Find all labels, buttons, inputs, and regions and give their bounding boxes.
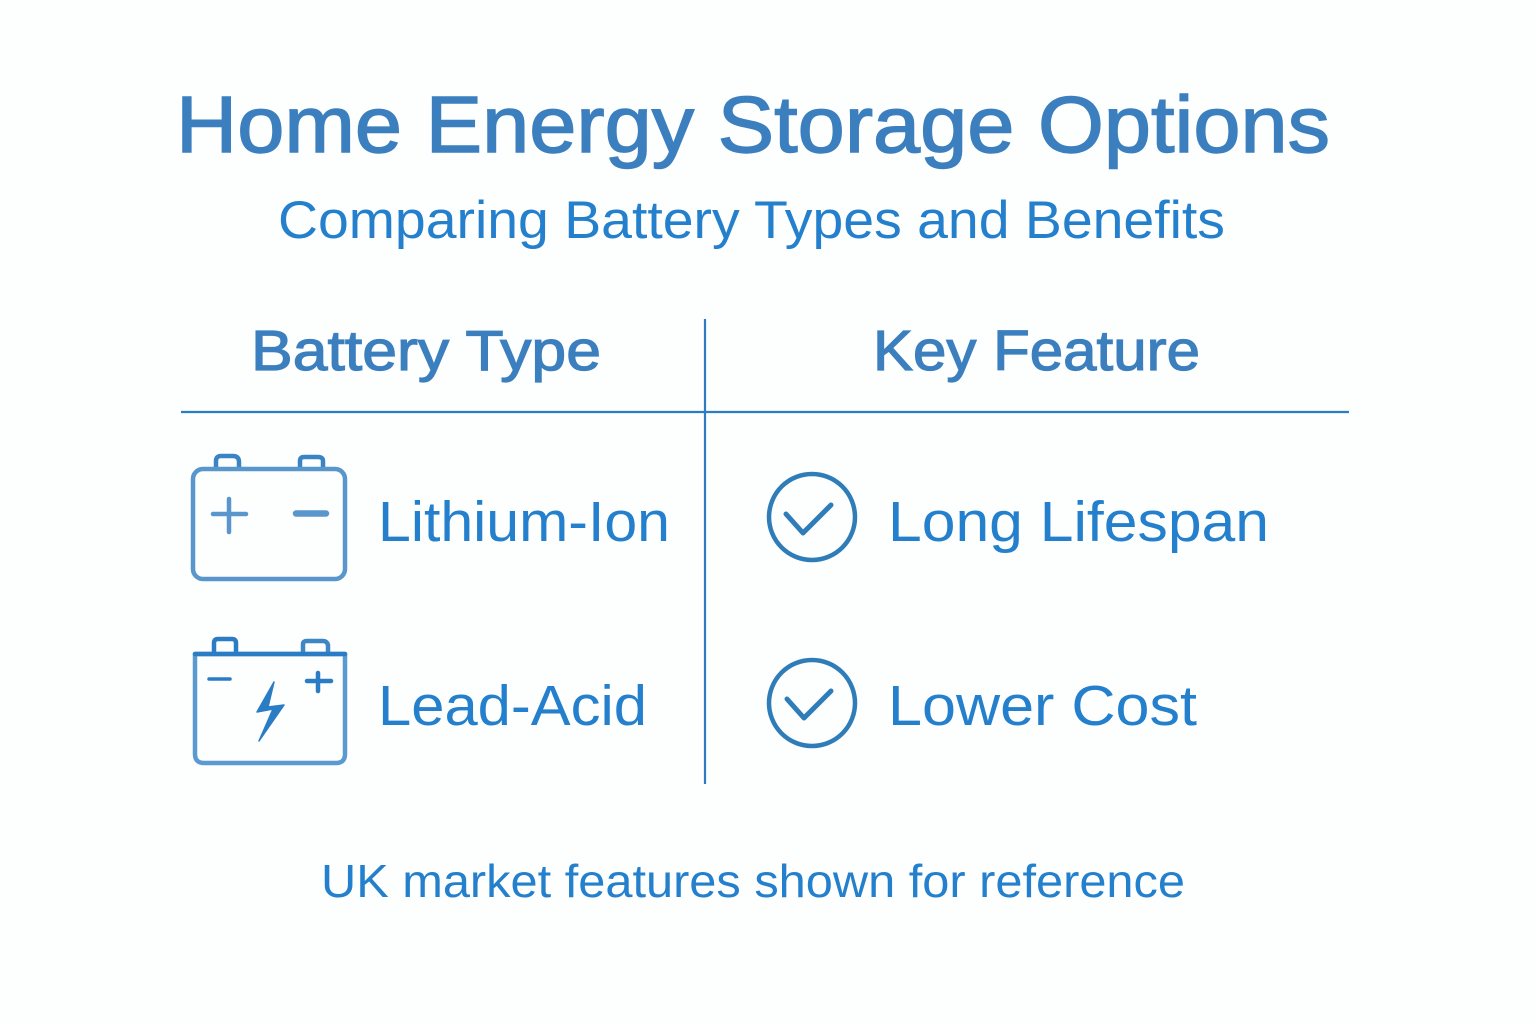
heading: battery type: Battery Type [251,319,601,383]
icon: check mark, long lifespan [769,474,855,560]
title: Home Energy Storage Options [176,80,1330,169]
subtitle: Comparing Battery Types and Benefits [278,191,1225,250]
icon: lithium-ion battery [193,456,345,579]
table grid lines [181,319,1349,784]
icon: lead-acid battery [195,639,345,763]
label: lower cost: Lower Cost [888,674,1197,738]
label: lithium-ion: Lithium-Ion [378,490,670,554]
footnote: UK market features shown for reference [321,855,1185,907]
heading: key feature: Key Feature [873,319,1200,383]
icon: check mark, lower cost [769,660,855,746]
label: long lifespan: Long Lifespan [888,490,1269,554]
label: lead-acid: Lead-Acid [378,674,647,738]
